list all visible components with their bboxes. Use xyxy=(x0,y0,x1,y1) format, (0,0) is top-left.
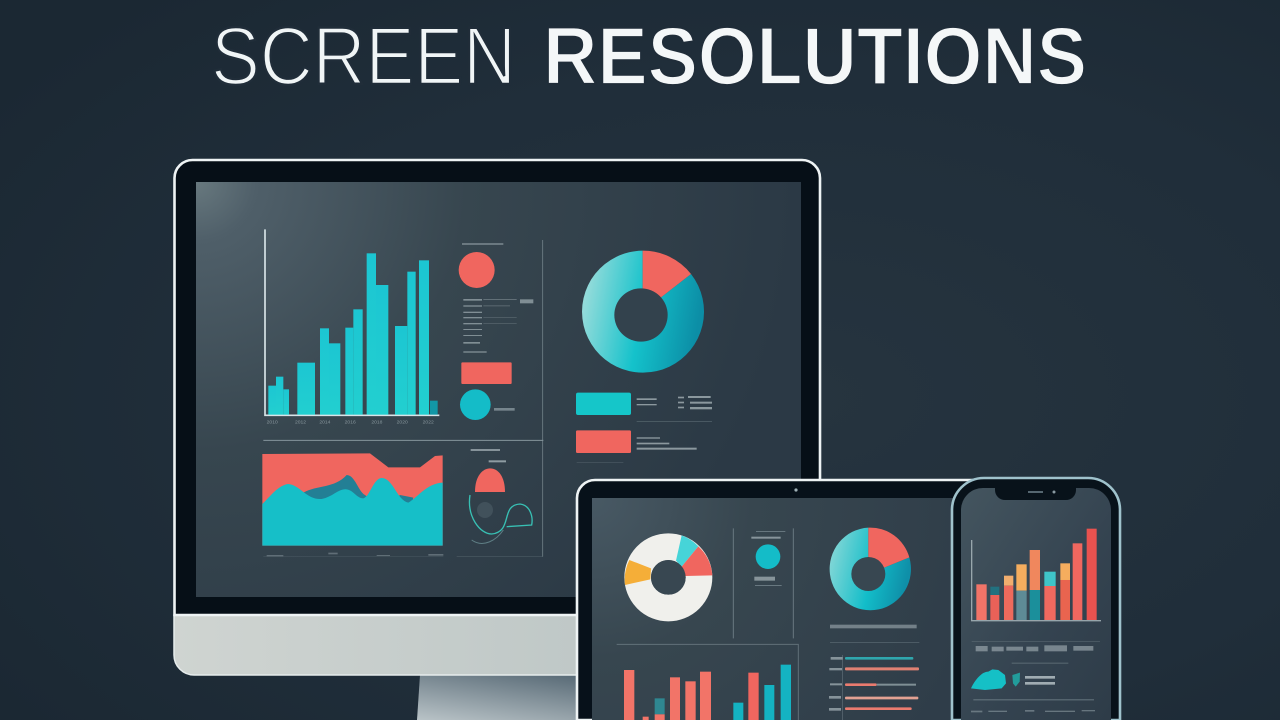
main donut chart xyxy=(576,251,712,463)
monitor bezel xyxy=(174,160,820,615)
main bar chart: 2016 xyxy=(345,420,356,426)
tablet center stat xyxy=(733,528,793,638)
gauge widget xyxy=(469,449,532,543)
desktop monitor xyxy=(174,160,820,720)
tablet donut: multicolour xyxy=(625,535,712,608)
teal mountain icon xyxy=(971,669,1006,690)
phone notch xyxy=(995,488,1076,500)
title: SCREEN xyxy=(211,11,516,102)
main bar chart: 2018 xyxy=(371,420,383,426)
tablet horizontal bars xyxy=(829,655,919,720)
main bar chart: 2012 xyxy=(295,420,306,426)
stacked area chart xyxy=(262,453,443,556)
phone screen xyxy=(961,488,1111,720)
monitor dividers xyxy=(263,240,543,557)
coral stat block xyxy=(461,362,512,384)
tablet screen xyxy=(592,498,962,720)
coral stat circle xyxy=(459,252,495,288)
monitor screen xyxy=(196,182,801,597)
phone bar chart xyxy=(972,529,1101,621)
smartphone xyxy=(952,478,1120,720)
teal stat circle xyxy=(460,389,491,420)
legend: coral xyxy=(576,430,697,463)
monitor stand xyxy=(417,675,640,720)
tablet camera xyxy=(794,488,798,492)
tablet bar chart xyxy=(617,644,798,720)
main bar chart: 2020 xyxy=(397,420,408,426)
side stats column xyxy=(459,243,533,420)
main bar chart: 2010 xyxy=(267,420,278,426)
tablet bezel xyxy=(577,480,980,720)
title xyxy=(211,11,1087,102)
phone lower details xyxy=(971,641,1100,712)
title: RESOLUTIONS xyxy=(543,11,1087,102)
legend: teal xyxy=(576,393,712,422)
main bar chart xyxy=(265,229,439,426)
tablet donut: coral and teal xyxy=(830,528,919,643)
phone body xyxy=(952,478,1120,720)
main bar chart: 2014 xyxy=(319,420,331,426)
monitor chin xyxy=(174,615,820,675)
tablet xyxy=(577,480,980,720)
main bar chart: 2022 xyxy=(423,420,434,426)
